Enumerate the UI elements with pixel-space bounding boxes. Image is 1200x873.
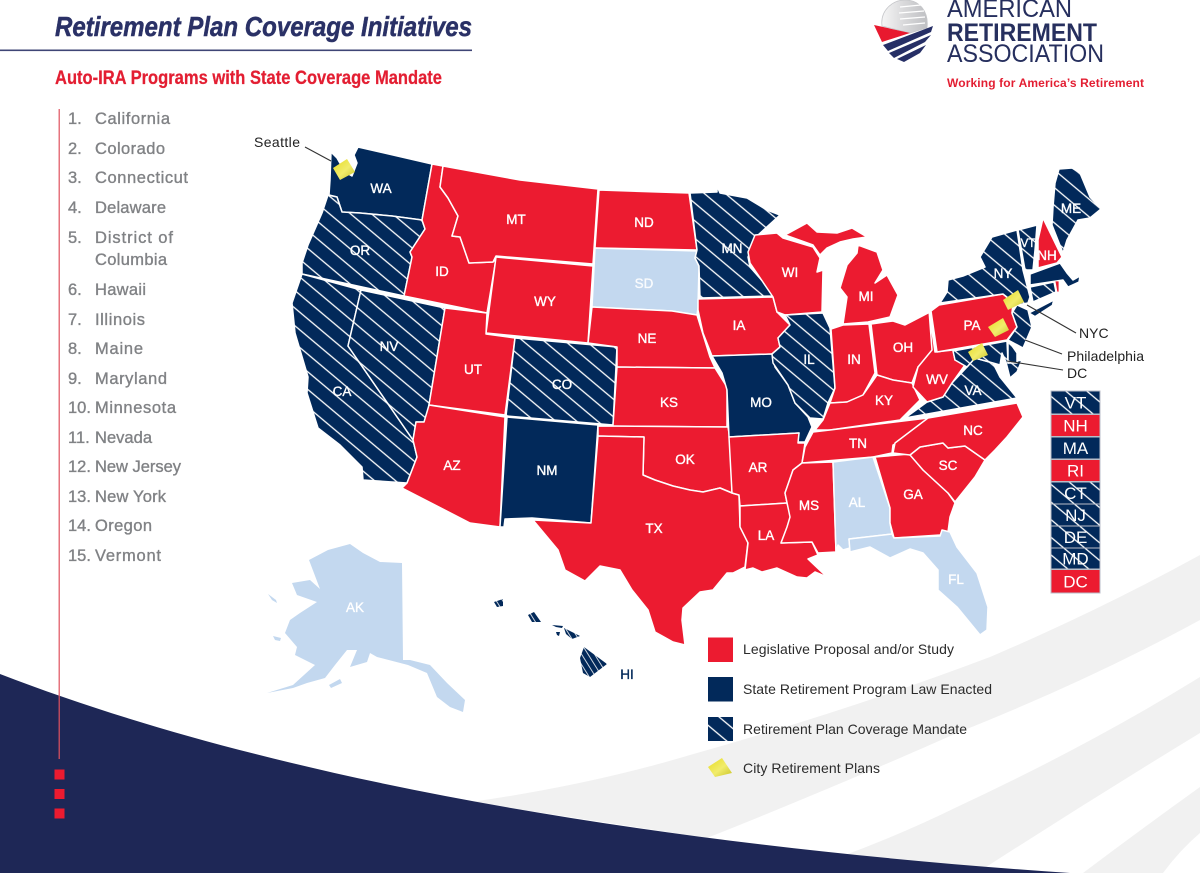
list of coverage mandate states: Oregon <box>95 517 152 535</box>
legend item: coverage mandate: Retirement Plan Coverage Mandate <box>743 721 967 737</box>
state abbreviation labels: NM <box>536 463 558 478</box>
state: MS <box>781 462 836 553</box>
state: UT <box>429 308 515 415</box>
list of coverage mandate states: 14. <box>68 517 91 535</box>
state: OH <box>871 312 934 383</box>
state abbreviation labels: KS <box>660 395 678 410</box>
callout row: DC <box>1052 570 1100 592</box>
state: SD <box>592 248 699 315</box>
state: AK islands <box>268 594 342 688</box>
list of coverage mandate states: 7. <box>68 311 82 329</box>
city labels: DC <box>1067 365 1087 381</box>
state abbreviation labels: OK <box>675 452 695 467</box>
state abbreviation labels: NE <box>638 331 656 346</box>
list of coverage mandate states: Maryland <box>95 370 167 388</box>
callout row: CT <box>1052 482 1100 504</box>
state: CA <box>292 274 417 483</box>
state: IN <box>830 324 875 403</box>
state: MA <box>1030 263 1080 287</box>
state abbreviation labels: AZ <box>443 458 461 473</box>
list of coverage mandate states: Vermont <box>95 547 161 565</box>
list of coverage mandate states: Colorado <box>95 140 165 158</box>
state: HI Oahu <box>528 612 541 622</box>
state abbreviation labels <box>333 181 1081 682</box>
state: HI Kauai <box>494 599 503 607</box>
state: WV <box>913 310 970 402</box>
state: MT <box>440 166 598 264</box>
list of coverage mandate states: 8. <box>68 340 82 358</box>
state abbreviation labels: ME <box>1061 201 1081 216</box>
list of coverage mandate states: Maine <box>95 340 143 358</box>
callout row: DE: DE <box>1064 528 1087 547</box>
state abbreviation labels: AR <box>749 460 768 475</box>
state: HI Maui <box>564 628 580 639</box>
state abbreviation labels: UT <box>464 362 482 377</box>
list of coverage mandate states: 3. <box>68 169 82 187</box>
state: AZ <box>402 405 505 527</box>
legend item: city plans <box>708 758 880 777</box>
callout row: VT: VT <box>1065 394 1086 412</box>
state abbreviation labels: LA <box>758 528 774 543</box>
state abbreviation labels: NV <box>380 339 398 354</box>
background: grey curved stripes <box>471 555 1200 873</box>
callout row: CT: CT <box>1064 484 1087 503</box>
logo wordmark <box>947 0 1104 68</box>
state: WA <box>329 147 432 220</box>
callout row: NH <box>1052 415 1100 436</box>
state: RI <box>1055 281 1059 292</box>
state: NV <box>348 290 445 440</box>
callout row: VT <box>1052 392 1100 414</box>
state: LA <box>740 503 827 578</box>
callout row: MD: MD <box>1062 550 1089 568</box>
state: MN <box>690 186 780 298</box>
legend item: law enacted: State Retirement Program Law Enacted <box>743 681 992 697</box>
state: PA <box>931 294 1017 352</box>
state: HI Big Island <box>580 647 607 677</box>
state: NC <box>893 403 1023 460</box>
state abbreviation labels: NH <box>1037 248 1057 263</box>
subtitle: Auto-IRA Programs with State Coverage Mandate <box>55 68 442 89</box>
state: WI <box>748 233 823 315</box>
map: United States <box>267 147 1101 712</box>
city labels: NYC <box>1079 325 1109 341</box>
state abbreviation labels: MT <box>506 212 526 227</box>
state: TX <box>533 436 748 645</box>
list of coverage mandate states: 11. <box>68 429 90 447</box>
state: AR <box>729 433 805 506</box>
legend item: legislative proposal: Legislative Proposal and/or Study <box>743 641 954 657</box>
legend <box>708 638 992 777</box>
list of coverage mandate states: 9. <box>68 370 82 388</box>
callout row: DC: DC <box>1063 572 1088 592</box>
state: ND <box>595 190 697 250</box>
state abbreviation labels: NY <box>994 266 1012 281</box>
state: NJ <box>1008 305 1032 348</box>
state: MO <box>712 354 812 442</box>
state abbreviation labels: SC <box>939 458 958 473</box>
state abbreviation labels: OR <box>350 243 370 258</box>
legend item: law enacted <box>708 677 992 702</box>
list of coverage mandate states: Nevada <box>95 429 153 447</box>
background: navy curved footer <box>0 674 1070 873</box>
state abbreviation labels: PA <box>963 318 981 333</box>
logo icon <box>874 0 933 62</box>
state: NH <box>1038 218 1062 268</box>
list of coverage mandate states: District of <box>95 229 173 247</box>
state: KS <box>598 367 727 427</box>
city pin: Philadelphia <box>988 318 1009 337</box>
state abbreviation labels: VA <box>964 383 982 398</box>
callout row: NH: NH <box>1063 416 1088 436</box>
callout row: DE <box>1052 526 1100 548</box>
logo tagline: Working for America’s Retirement <box>947 76 1144 90</box>
state abbreviation labels: WV <box>926 372 948 387</box>
list of coverage mandate states: Hawaii <box>95 281 146 299</box>
callout row: MA: MA <box>1063 439 1089 458</box>
list of coverage mandate states: Minnesota <box>95 399 177 417</box>
legend item: coverage mandate <box>708 717 967 741</box>
state: ID <box>404 164 496 313</box>
state abbreviation labels: HI <box>620 667 634 682</box>
leader lines for city labels <box>305 147 1076 370</box>
state abbreviation labels: NC <box>963 423 983 438</box>
list of coverage mandate states: Columbia <box>95 251 168 269</box>
state: FL <box>849 530 988 635</box>
state: VT <box>1018 225 1037 270</box>
logo wordmark: ASSOCIATION <box>947 40 1104 68</box>
city labels <box>254 134 1144 381</box>
state abbreviation labels: WA <box>370 181 392 196</box>
list of coverage mandate states: Connecticut <box>95 169 188 187</box>
list of coverage mandate states <box>68 110 188 565</box>
state: MI lower <box>840 245 898 324</box>
callout row: NJ: NJ <box>1065 506 1086 525</box>
state abbreviation labels: AL <box>849 495 866 510</box>
state: TN <box>802 418 928 463</box>
state abbreviation labels: ID <box>435 264 449 279</box>
state: CT <box>1030 282 1056 302</box>
state: SC <box>910 443 985 502</box>
state: WY <box>486 257 593 343</box>
list of coverage mandate states: 15. <box>68 547 91 565</box>
state: AL <box>833 457 892 552</box>
state abbreviation labels: FL <box>948 572 964 587</box>
list of coverage mandate states: California <box>95 110 171 128</box>
legend item: city plans: City Retirement Plans <box>743 760 880 776</box>
callout row: NJ <box>1052 504 1100 526</box>
state: NM <box>500 417 598 527</box>
state abbreviation labels: MI <box>858 289 874 304</box>
list of coverage mandate states: New Jersey <box>95 458 182 476</box>
state: HI Lanai <box>556 632 560 636</box>
logo: American Retirement Association <box>874 0 1144 90</box>
title rule <box>0 50 472 51</box>
state: NE <box>588 307 715 368</box>
callout row: MD <box>1052 548 1100 568</box>
state: GA <box>875 454 955 538</box>
state abbreviation labels: SD <box>635 276 654 291</box>
list of coverage mandate states: 1. <box>68 110 82 128</box>
list of coverage mandate states: New York <box>95 488 167 506</box>
list of coverage mandate states: 2. <box>68 140 82 158</box>
state abbreviation labels: IN <box>847 352 861 367</box>
city labels: Philadelphia <box>1067 348 1144 364</box>
state abbreviation labels: ND <box>634 215 654 230</box>
state abbreviation labels: WY <box>534 294 556 309</box>
list of coverage mandate states: 4. <box>68 199 82 217</box>
state: NY Long Island <box>1030 301 1053 316</box>
list of coverage mandate states: 13. <box>68 488 91 506</box>
state: KY <box>815 375 920 430</box>
state abbreviation labels: WI <box>782 265 798 280</box>
state abbreviation labels: VT <box>1021 238 1035 250</box>
state: OK <box>598 426 732 493</box>
state: AK <box>267 544 465 712</box>
list of coverage mandate states: 5. <box>68 229 82 247</box>
city labels: Seattle <box>254 134 300 150</box>
state abbreviation labels: IL <box>803 352 815 367</box>
state abbreviation labels: TN <box>849 436 867 451</box>
callout row: RI <box>1052 460 1100 481</box>
state abbreviation labels: AK <box>346 600 364 615</box>
state: MI upper <box>785 223 867 255</box>
list of coverage mandate states: 10. <box>68 399 91 417</box>
city pin: DC <box>968 343 988 361</box>
state: IL <box>772 313 835 419</box>
city pin: Seattle <box>333 159 355 180</box>
callout row: MA <box>1052 438 1100 458</box>
state abbreviation labels: CO <box>552 377 572 392</box>
state abbreviation labels: TX <box>645 521 663 536</box>
state: MD <box>953 341 1022 378</box>
state: VA <box>905 358 1017 418</box>
state: OR <box>302 195 425 296</box>
list of coverage mandate states: 6. <box>68 281 82 299</box>
state: HI Molokai <box>552 625 563 628</box>
list of coverage mandate states: 12. <box>68 458 91 476</box>
state abbreviation labels: OH <box>893 340 913 355</box>
city pin: NYC <box>1003 290 1024 310</box>
callout row: RI: RI <box>1067 462 1084 480</box>
state: IA <box>698 297 790 356</box>
legend item: legislative proposal <box>708 638 954 662</box>
state: NY <box>940 230 1030 305</box>
list of coverage mandate states: Illinois <box>95 311 145 329</box>
state abbreviation labels: GA <box>903 487 923 502</box>
list of coverage mandate states: Delaware <box>95 199 166 217</box>
state abbreviation labels: MS <box>799 498 819 513</box>
title: Retirement Plan Coverage Initiatives <box>55 11 472 42</box>
state: CO <box>506 338 617 425</box>
state abbreviation labels: KY <box>875 393 893 408</box>
state abbreviation labels: IA <box>733 318 745 333</box>
logo wordmark: RETIREMENT <box>947 19 1097 47</box>
state abbreviation labels: CA <box>333 384 351 399</box>
state abbreviation labels: MO <box>750 395 772 410</box>
side line with red squares <box>54 109 64 818</box>
state: ME <box>1052 168 1101 253</box>
callout: northeast small states <box>1050 390 1100 594</box>
state: DE <box>1008 340 1017 363</box>
state abbreviation labels: MN <box>722 241 742 256</box>
